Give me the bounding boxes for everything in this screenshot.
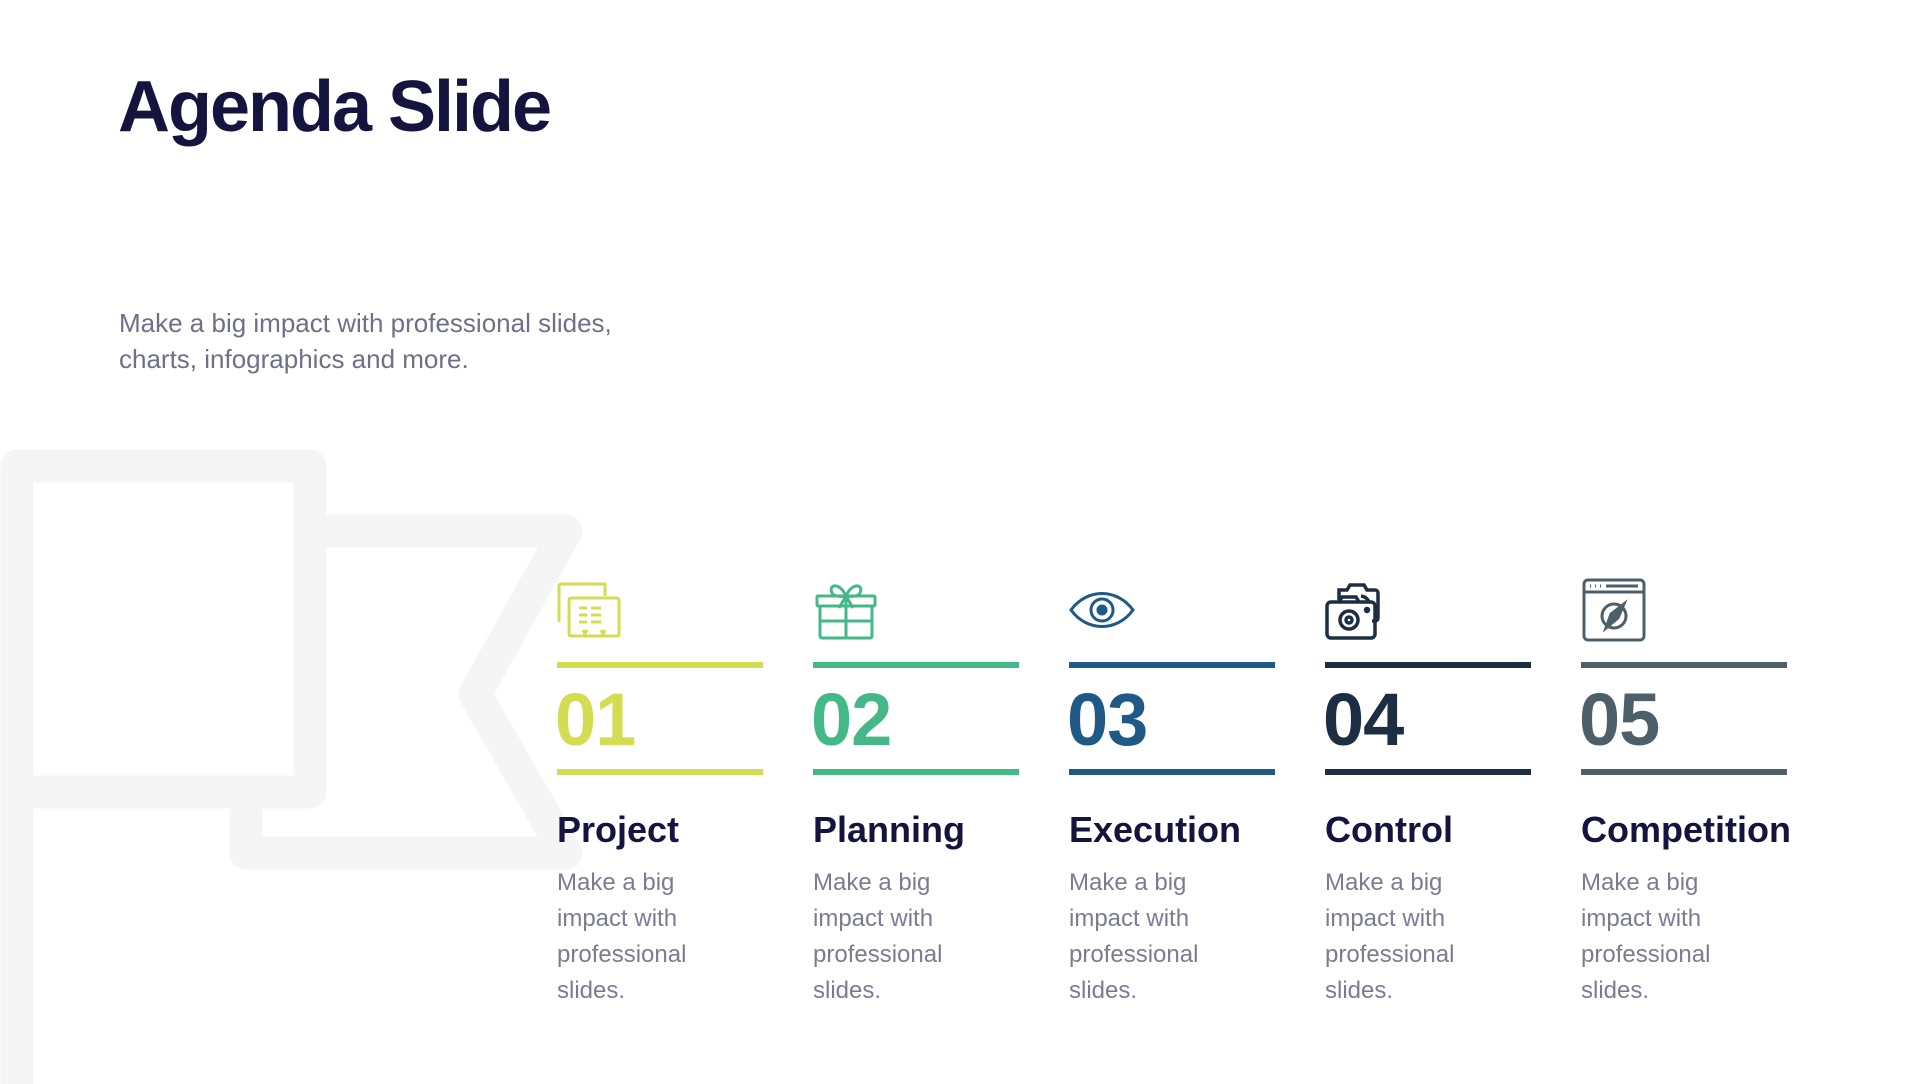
icon: documents — [558, 582, 620, 638]
text: Make a big — [813, 869, 930, 896]
column 3 — [1067, 592, 1275, 1004]
heading: Execution — [1069, 809, 1241, 850]
text: impact with — [557, 905, 677, 932]
text: impact with — [1069, 905, 1189, 932]
text: Make a big — [557, 869, 674, 896]
column 5 — [1579, 578, 1791, 1004]
text: Make a big — [1325, 869, 1442, 896]
title: Agenda Slide — [118, 67, 550, 147]
text: professional — [1325, 941, 1454, 968]
column 1 — [555, 582, 763, 1004]
text: slides. — [1069, 977, 1137, 1004]
icon: eye — [1069, 592, 1135, 628]
number 02: 02 — [811, 678, 891, 761]
heading: Control — [1325, 809, 1453, 850]
text: professional — [1069, 941, 1198, 968]
text: slides. — [1581, 977, 1649, 1004]
text: professional — [1581, 941, 1710, 968]
text: Make a big — [1069, 869, 1186, 896]
text: impact with — [1325, 905, 1445, 932]
column 2 — [811, 584, 1019, 1004]
text — [1069, 869, 1198, 1004]
subtitle — [119, 308, 612, 374]
icon: gift — [816, 584, 876, 640]
heading: Competition — [1581, 809, 1791, 850]
number 04: 04 — [1323, 678, 1403, 761]
text — [1581, 869, 1710, 1004]
icon: cameras — [1325, 583, 1380, 640]
column 4 — [1323, 583, 1531, 1004]
text: slides. — [1325, 977, 1393, 1004]
icon: browser compass — [1582, 578, 1646, 642]
text: slides. — [813, 977, 881, 1004]
number 03: 03 — [1067, 678, 1147, 761]
text: professional — [557, 941, 686, 968]
subtitle: Make a big impact with professional slides, — [119, 308, 612, 338]
heading: Project — [557, 809, 679, 850]
number 01: 01 — [555, 678, 635, 761]
text: impact with — [1581, 905, 1701, 932]
number 05: 05 — [1579, 678, 1659, 761]
text: Make a big — [1581, 869, 1698, 896]
subtitle: charts, infographics and more. — [119, 344, 469, 374]
text: impact with — [813, 905, 933, 932]
text — [557, 869, 686, 1004]
text — [1325, 869, 1454, 1004]
text — [813, 869, 942, 1004]
text: slides. — [557, 977, 625, 1004]
heading: Planning — [813, 809, 965, 850]
text: professional — [813, 941, 942, 968]
